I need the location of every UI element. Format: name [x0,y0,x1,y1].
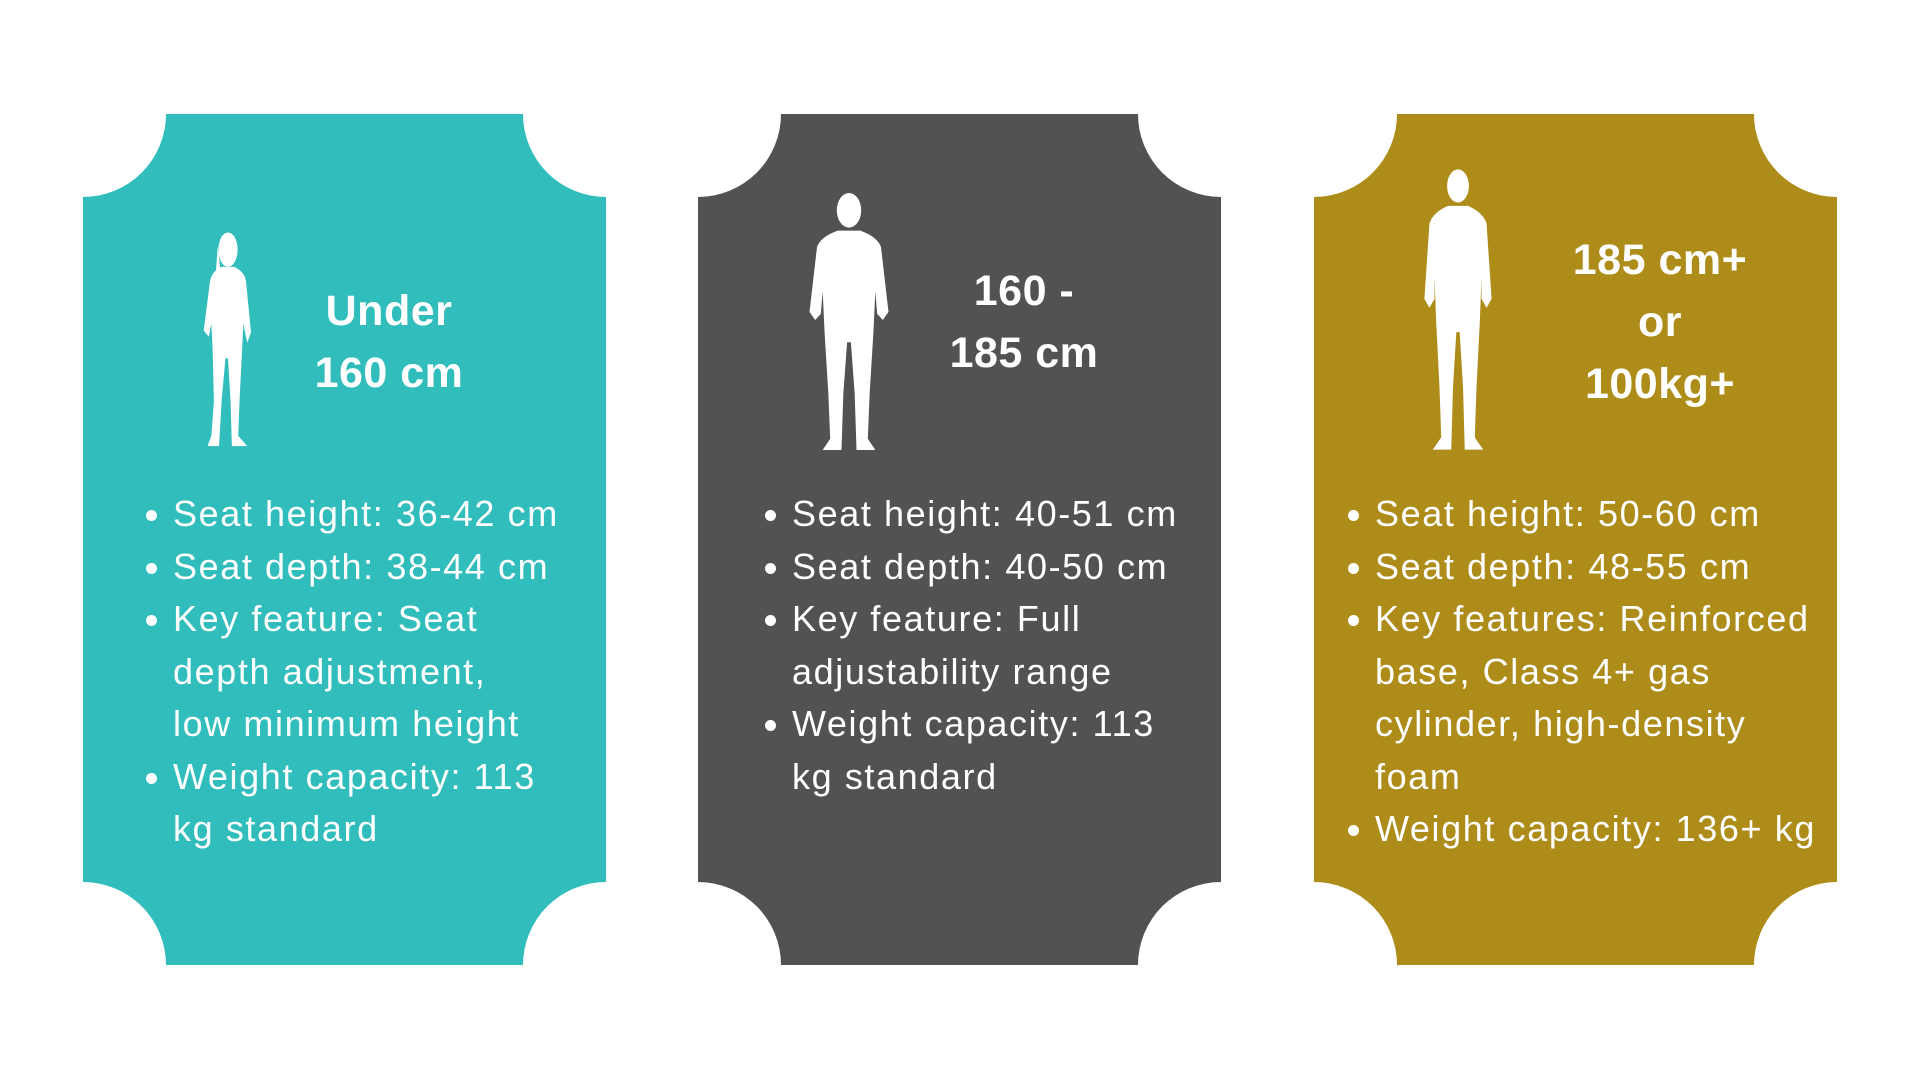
text block: bullets: adjustability range [792,650,1113,692]
text block: bullets: Seat depth: 38-44 cm [173,546,549,586]
text block: bullets: Weight capacity: 113 [173,756,536,796]
panel: 160-185 cm [698,114,1221,965]
text block: bullets: Key features: Reinforced [1375,598,1810,639]
heading: 160-185 cm: 160 - [974,267,1074,315]
panel: 185 cm+ [1314,114,1837,965]
text block: bullets: Seat height: 50-60 cm [1375,493,1761,534]
heading: 160-185 cm [950,267,1098,377]
text block: bullets: Key feature: Full [792,598,1081,639]
text block: bullets: kg standard [792,756,998,796]
text block: bullets: Weight capacity: 113 [792,703,1155,744]
panel: under 160 cm [83,114,606,965]
text block: bullets: foam [1375,756,1461,796]
text block: bullets: Seat depth: 40-50 cm [792,546,1168,586]
text block: bullets: Key feature: Seat [173,598,478,639]
text block: bullets: depth adjustment, [173,650,486,692]
heading: under 160 cm: Under [326,287,452,335]
icon: tall male silhouette [1424,169,1492,450]
icon: male silhouette [810,193,888,450]
heading: 185 cm+ or 100kg+: 100kg+ [1585,360,1735,408]
text block: bullets [765,493,1178,796]
text block: bullets: Seat height: 40-51 cm [792,493,1178,534]
icon: female silhouette [204,232,251,446]
text block: bullets: cylinder, high-density [1375,703,1746,744]
heading: under 160 cm: 160 cm [315,349,463,397]
text block: bullets: Weight capacity: 136+ kg [1375,808,1816,849]
heading: 160-185 cm: 185 cm [950,329,1098,377]
heading: 185 cm+ or 100kg+ [1573,236,1747,408]
text block: bullets: kg standard [173,808,379,849]
text block: bullets: low minimum height [173,703,520,744]
heading: under 160 cm [315,287,463,397]
text block: bullets [1348,493,1816,849]
heading: 185 cm+ or 100kg+: or [1638,298,1682,346]
text block: bullets: base, Class 4+ gas [1375,650,1711,692]
text block: bullets [146,493,559,849]
text block: bullets: Seat depth: 48-55 cm [1375,546,1751,586]
text block: bullets: Seat height: 36-42 cm [173,493,559,534]
heading: 185 cm+ or 100kg+: 185 cm+ [1573,236,1747,284]
